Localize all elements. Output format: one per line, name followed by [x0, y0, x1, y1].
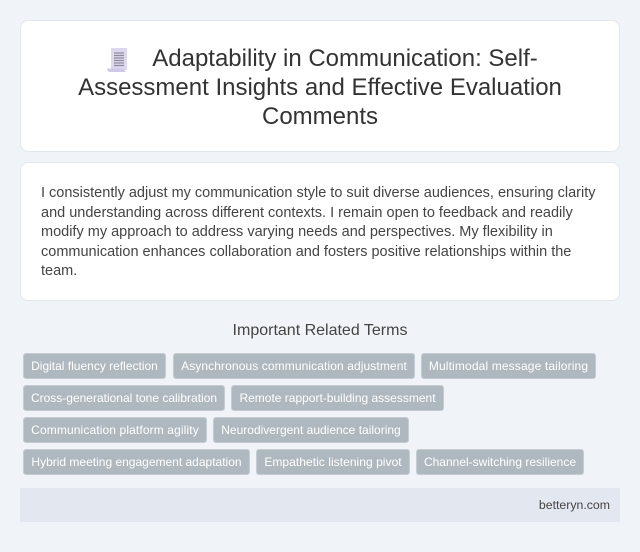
tag: Cross-generational tone calibration: [31, 391, 217, 405]
body text: modify my approach to address varying needs and perspectives. My flexibility in: [41, 224, 553, 240]
title: Adaptability in Communication: Self-: [152, 45, 538, 72]
footer credit: betteryn.com: [539, 498, 610, 512]
icon: document scroll: [107, 48, 127, 72]
body text: and understanding across different contexts. I remain open to feedback and readily: [41, 204, 573, 220]
heading: related terms: Important Related Terms: [233, 322, 407, 339]
tag: Neurodivergent audience tailoring: [221, 423, 401, 437]
footer bar: [20, 488, 620, 522]
tag: [23, 449, 250, 475]
body text: I consistently adjust my communication style to suit diverse audiences, ensuring clarity: [41, 185, 595, 201]
body text: [41, 185, 596, 279]
tag: Channel-switching resilience: [424, 455, 576, 469]
tag: [213, 417, 409, 443]
tag list: [23, 353, 596, 475]
tag: Empathetic listening pivot: [264, 455, 402, 469]
panel: self-assessment text: [20, 162, 620, 301]
title: Comments: [262, 103, 378, 130]
title: [78, 45, 562, 130]
panel: title card: [20, 20, 620, 152]
body text: team.: [41, 263, 77, 279]
tag: Communication platform agility: [31, 423, 199, 437]
tag: [421, 353, 596, 379]
tag: [23, 417, 207, 443]
tag: Digital fluency reflection: [31, 359, 158, 373]
tag: Asynchronous communication adjustment: [181, 359, 407, 373]
tag: [231, 385, 444, 411]
title: Assessment Insights and Effective Evaluation: [78, 74, 562, 101]
tag: [23, 385, 225, 411]
tag: [173, 353, 415, 379]
tag: [23, 353, 166, 379]
tag: Hybrid meeting engagement adaptation: [31, 455, 242, 469]
tag: Remote rapport-building assessment: [239, 391, 436, 405]
body text: communication enhances collaboration and fosters positive relationships within the: [41, 244, 571, 260]
tag: [256, 449, 410, 475]
tag: [416, 449, 584, 475]
tag: Multimodal message tailoring: [429, 359, 588, 373]
